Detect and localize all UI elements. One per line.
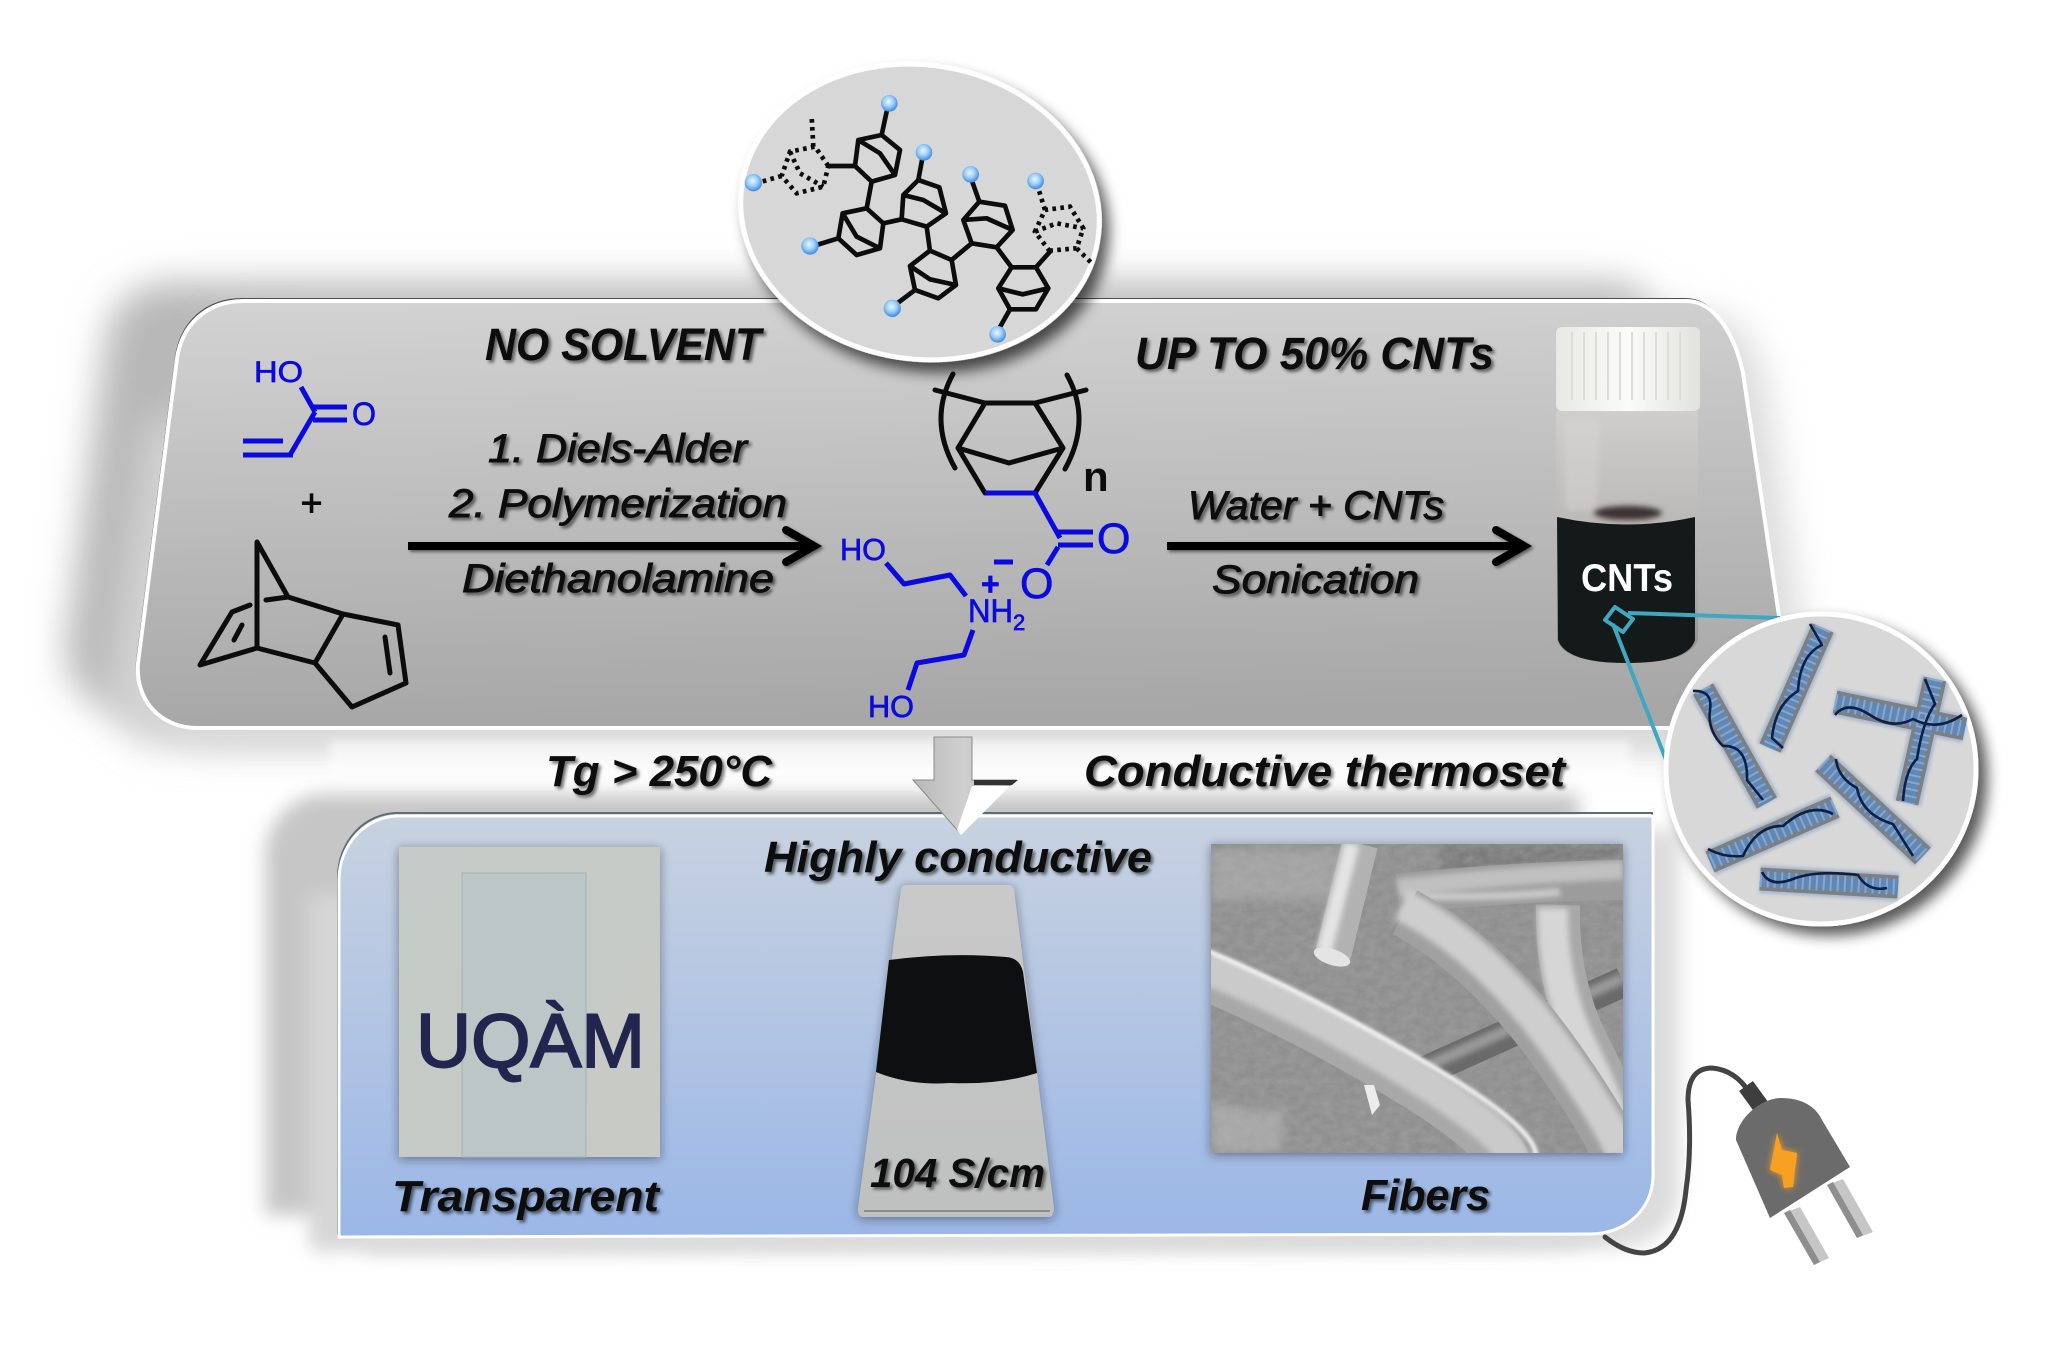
photo: SEM fibers — [1205, 844, 1628, 1170]
photo: transparent film over UQAM logo: UQÀM — [416, 999, 645, 1084]
panel: synthesis (grey) — [137, 299, 1787, 728]
inset: CNT circle — [1666, 614, 1976, 924]
polymer salt structure: + — [981, 566, 1000, 602]
label: up to 50% CNTs: UP TO 50% CNTs — [1135, 328, 1494, 379]
polymer salt structure: O — [1097, 515, 1130, 563]
photo: transparent film over UQAM logo — [399, 847, 660, 1157]
panel shadows — [66, 282, 1811, 1251]
arrow: down to results — [913, 737, 1018, 835]
zoom callout lines — [1605, 607, 1780, 765]
label: fibers: Fibers — [1361, 1171, 1490, 1220]
panel: results (blue) — [338, 813, 1653, 1237]
label: diethanolamine: Diethanolamine — [462, 557, 774, 601]
polymer salt structure: HO — [868, 689, 914, 724]
label: Diels-Alder: 1. Diels-Alder — [488, 427, 749, 471]
label: water + CNTs: Water + CNTs — [1188, 484, 1444, 528]
acrylic acid structure: O — [352, 396, 376, 432]
label: transparent: Transparent — [392, 1172, 661, 1221]
inset: polymer chain circle — [719, 39, 1121, 385]
polymer salt structure: O — [1020, 560, 1053, 608]
plug cable — [1605, 1068, 1749, 1253]
carbon nanotubes wrapped by polymer — [1693, 624, 1965, 889]
polymer salt structure — [840, 374, 1130, 724]
label: highly conductive: Highly conductive — [764, 833, 1152, 882]
polymer salt structure: HO — [840, 532, 886, 567]
photo: coated slide — [858, 885, 1054, 1217]
dicyclopentadiene structure — [200, 542, 406, 707]
label: polymerization: 2. Polymerization — [448, 482, 787, 526]
label: conductivity value: 104 S/cm — [870, 1150, 1045, 1196]
label: sonication: Sonication — [1212, 558, 1419, 602]
label: conductive thermoset: Conductive thermoset — [1084, 747, 1567, 796]
icon: vial with CNT dispersion — [1556, 327, 1700, 663]
vial label: CNTs — [1581, 557, 1673, 600]
reaction arrow 1 — [408, 530, 814, 562]
polymer salt structure: 2 — [1013, 610, 1025, 635]
polymer salt structure: n — [1083, 453, 1109, 500]
plus sign: + — [300, 483, 322, 525]
label: no solvent: NO SOLVENT — [485, 319, 764, 370]
label: Tg: Tg > 250°C — [546, 747, 773, 796]
polymer chain skeleton — [745, 95, 1093, 343]
dashed end units — [762, 117, 1093, 264]
acrylic acid structure: HO — [254, 356, 303, 389]
lightning bolt — [1770, 1133, 1797, 1188]
blue end-group spheres — [745, 95, 1044, 343]
acrylic acid structure — [243, 356, 376, 455]
reaction arrow 2 — [1167, 530, 1524, 562]
polymer salt structure: NH — [968, 593, 1013, 629]
icon: electric plug — [1605, 1068, 1873, 1265]
